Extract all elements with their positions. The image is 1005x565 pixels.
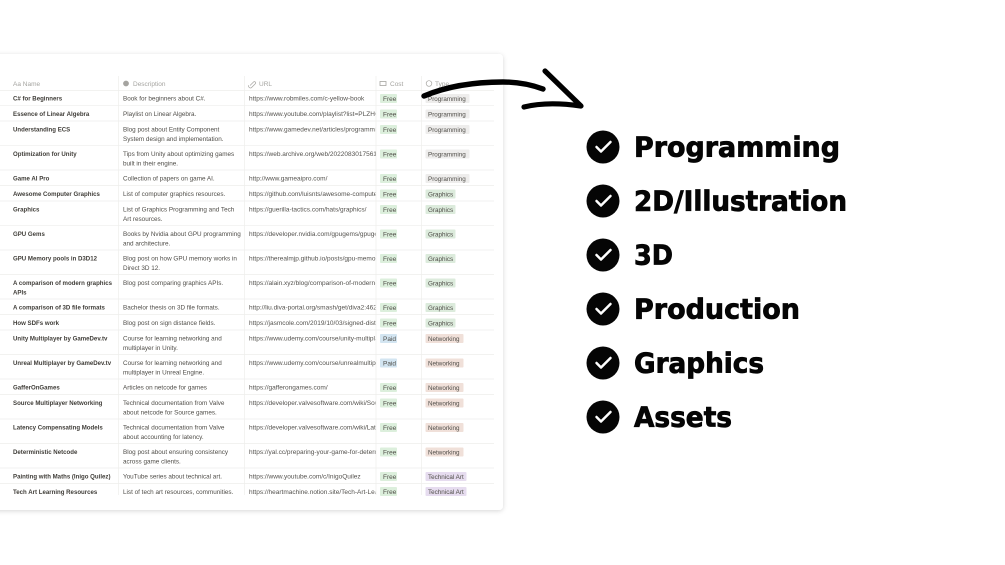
column: descriptions: multiplayer in Unity.: [123, 345, 178, 352]
column: cost tags: Paid: [383, 336, 396, 343]
column: names: Optimization for Unity: [13, 151, 77, 158]
column: urls: https://www.robmiles.com/c-yellow-book: [249, 96, 365, 102]
column: urls: https://developer.valvesoftware.com/wiki/Latency_Compensating: [249, 424, 435, 432]
column: urls: https://heartmachine.notion.site/Tech-Art-Learning-Resources: [249, 489, 427, 496]
column: type tags: Networking: [428, 336, 460, 343]
column: cost tags: Free: [383, 96, 397, 103]
checklist: [586, 130, 847, 434]
column: type tags: Networking: [428, 360, 460, 368]
column: urls: [249, 96, 376, 496]
table header: Description: [133, 81, 166, 88]
column: names: Latency Compensating Models: [13, 424, 103, 432]
column: urls: https://web.archive.org/web/20220830175614/https://unity: [249, 151, 416, 158]
column: names: A comparison of modern graphics: [13, 280, 113, 287]
column: descriptions: Book for beginners about C#.: [123, 96, 206, 102]
column: cost tags: Free: [383, 385, 397, 392]
table header: Cost: [390, 81, 404, 88]
item: Programming: Programming: [634, 130, 840, 164]
column: cost tags: Free: [383, 176, 397, 183]
column: names: Graphics: [13, 206, 40, 214]
column: urls: https://jasmcole.com/2019/10/03/signed-distance-fields: [249, 320, 408, 327]
column: type tags: Programming: [428, 127, 466, 134]
column: type tags: Technical Art: [428, 489, 464, 496]
column: cost tags: Free: [383, 207, 397, 214]
table header: Aa Name: [13, 81, 40, 88]
column: cost tags: [380, 94, 397, 496]
column: type tags: [426, 94, 470, 496]
item: Assets: [586, 400, 732, 434]
column: cost tags: Paid: [383, 360, 396, 368]
column: cost tags: Free: [383, 400, 397, 408]
table header: [13, 81, 449, 88]
panel: resource table: [0, 54, 503, 510]
column: type tags: Programming: [428, 176, 466, 183]
column: type tags: Graphics: [428, 232, 453, 238]
item: Assets: Assets: [634, 400, 732, 434]
column: type tags: Programming: [428, 112, 466, 118]
column: type tags: Graphics: [428, 320, 453, 328]
column: descriptions: Blog post on how GPU memory works in: [123, 256, 237, 262]
column: descriptions: Blog post comparing graphics APIs.: [123, 280, 223, 287]
column: descriptions: List of computer graphics resources.: [123, 191, 225, 198]
column: type tags: Graphics: [428, 256, 453, 263]
item: Graphics: [586, 346, 764, 380]
column: names: Essence of Linear Algebra: [13, 111, 90, 118]
column: descriptions: Blog post about ensuring consistency: [123, 449, 229, 456]
column: descriptions: Technical documentation from Valve: [123, 424, 225, 432]
column: descriptions: Course for learning networking and: [123, 336, 222, 342]
column: names: How SDFs work: [13, 320, 60, 327]
column: urls: https://alain.xyz/blog/comparison-of-modern-graphics-apis: [249, 280, 417, 287]
column: type tags: Programming: [428, 96, 466, 103]
column: descriptions: Collection of papers on game AI.: [123, 176, 215, 182]
column: descriptions: about netcode for Source games.: [123, 410, 217, 416]
column: type tags: Graphics: [428, 207, 453, 214]
column: type tags: Technical Art: [428, 474, 464, 481]
column: urls: https://yal.cc/preparing-your-game-for-deterministic-netcode: [249, 449, 422, 456]
column: urls: https://www.youtube.com/playlist?list=PLZHQObOWTQDPD3MizzM2xVFitgF8hE_ab: [249, 111, 494, 118]
column: urls: http://www.gameaipro.com/: [249, 176, 328, 182]
column: names: Deterministic Netcode: [13, 449, 78, 456]
column: names: GafferOnGames: [13, 384, 60, 392]
item: Graphics: Graphics: [634, 346, 764, 380]
item: 2D/Illustration: 2D/Illustration: [634, 184, 847, 218]
column: cost tags: Free: [383, 450, 397, 456]
column: type tags: Graphics: [428, 305, 453, 312]
column: names: Awesome Computer Graphics: [13, 191, 101, 198]
column: names: GPU Gems: [13, 231, 45, 238]
column: descriptions: Blog post about Entity Component: [123, 126, 220, 134]
column: names: Source Multiplayer Networking: [13, 400, 103, 407]
column: cost tags: Free: [383, 489, 397, 496]
column: descriptions: Books by Nvidia about GPU programming: [123, 231, 241, 238]
column: type tags: Networking: [428, 385, 460, 392]
column: cost tags: Free: [383, 232, 397, 238]
column: descriptions: across game clients.: [123, 458, 181, 466]
column: urls: https://developer.nvidia.com/gpugems/gpugems/contributors: [249, 231, 423, 238]
table header: URL: [259, 81, 272, 88]
column: urls: http://liu.diva-portal.org/smash/get/diva2:462853/FULLTEXT: [249, 304, 422, 312]
column: type tags: Networking: [428, 450, 460, 456]
column: names: Understanding ECS: [13, 126, 70, 134]
column: urls: https://github.com/luisnts/awesome-computer-graphics: [249, 191, 407, 198]
column: descriptions: Blog post on sign distance fields.: [123, 320, 216, 327]
column: descriptions: System design and implementation.: [123, 136, 224, 143]
table header: Type: [435, 81, 449, 88]
column: descriptions: List of Graphics Programming and Tech: [123, 206, 235, 214]
column: type tags: Programming: [428, 152, 466, 158]
column: descriptions: multiplayer in Unreal Engine.: [123, 370, 204, 376]
column: cost tags: Free: [383, 474, 397, 481]
column: urls: https://www.gamedev.net/articles/programming/general: [249, 126, 408, 134]
column: descriptions: Playlist on Linear Algebra.: [123, 111, 197, 118]
column: cost tags: Free: [383, 112, 397, 118]
column: descriptions: List of tech art resources, communities.: [123, 489, 234, 496]
column: descriptions: about accounting for latency.: [123, 434, 204, 441]
item: 3D: 3D: [634, 238, 673, 272]
column: descriptions: Direct 3D 12.: [123, 265, 160, 272]
column: urls: https://developer.valvesoftware.com/wiki/Source_Multiplayer: [249, 400, 423, 407]
column: names: Painting with Maths (Inigo Quilez): [13, 474, 110, 480]
column: descriptions: built in their engine.: [123, 160, 178, 168]
column: names: APIs: [13, 290, 27, 296]
column: cost tags: Free: [383, 192, 397, 198]
column: descriptions: YouTube series about technical art.: [123, 474, 222, 480]
column: names: Tech Art Learning Resources: [13, 489, 98, 496]
column: cost tags: Free: [383, 280, 397, 288]
column: descriptions: and architecture.: [123, 240, 170, 248]
column: type tags: Networking: [428, 400, 460, 408]
column: cost tags: Free: [383, 152, 397, 158]
column: names: A comparison of 3D file formats: [13, 304, 105, 312]
column: urls: https://guerilla-tactics.com/hats/graphics/: [249, 206, 367, 214]
column: names: [13, 96, 113, 496]
item: 3D: [586, 238, 673, 272]
column: urls: https://gafferongames.com/: [249, 384, 328, 392]
column: names: C# for Beginners: [13, 96, 63, 102]
column: names: Game AI Pro: [13, 176, 50, 182]
column: type tags: Graphics: [428, 280, 453, 288]
column: descriptions: Tips from Unity about optimizing games: [123, 151, 234, 158]
column: urls: https://therealmjp.github.io/posts/gpu-memory-pool: [249, 256, 396, 262]
column: names: Unity Multiplayer by GameDev.tv: [13, 336, 108, 342]
column: type tags: Graphics: [428, 192, 453, 198]
column: cost tags: Free: [383, 127, 397, 134]
column: descriptions: Technical documentation from Valve: [123, 400, 225, 407]
column: type tags: Networking: [428, 425, 460, 432]
column: names: GPU Memory pools in D3D12: [13, 256, 98, 262]
column: cost tags: Free: [383, 256, 397, 263]
column: descriptions: Art resources.: [123, 216, 163, 223]
column: descriptions: Bachelor thesis on 3D file formats.: [123, 304, 220, 312]
column: descriptions: Course for learning networking and: [123, 360, 222, 367]
column: urls: https://www.udemy.com/course/unity-multiplayer: [249, 336, 388, 342]
column: cost tags: Free: [383, 305, 397, 312]
column: cost tags: Free: [383, 320, 397, 328]
column: names: Unreal Multiplayer by GameDev.tv: [13, 360, 112, 367]
column: urls: https://www.youtube.com/c/InigoQuilez: [249, 474, 361, 480]
column: descriptions: [123, 96, 241, 496]
item: Production: Production: [634, 292, 800, 326]
column: urls: https://www.udemy.com/course/unrealmultiplayer: [249, 360, 391, 367]
column: descriptions: Articles on netcode for games: [123, 384, 207, 392]
arrow: [424, 71, 581, 107]
column: cost tags: Free: [383, 425, 397, 432]
